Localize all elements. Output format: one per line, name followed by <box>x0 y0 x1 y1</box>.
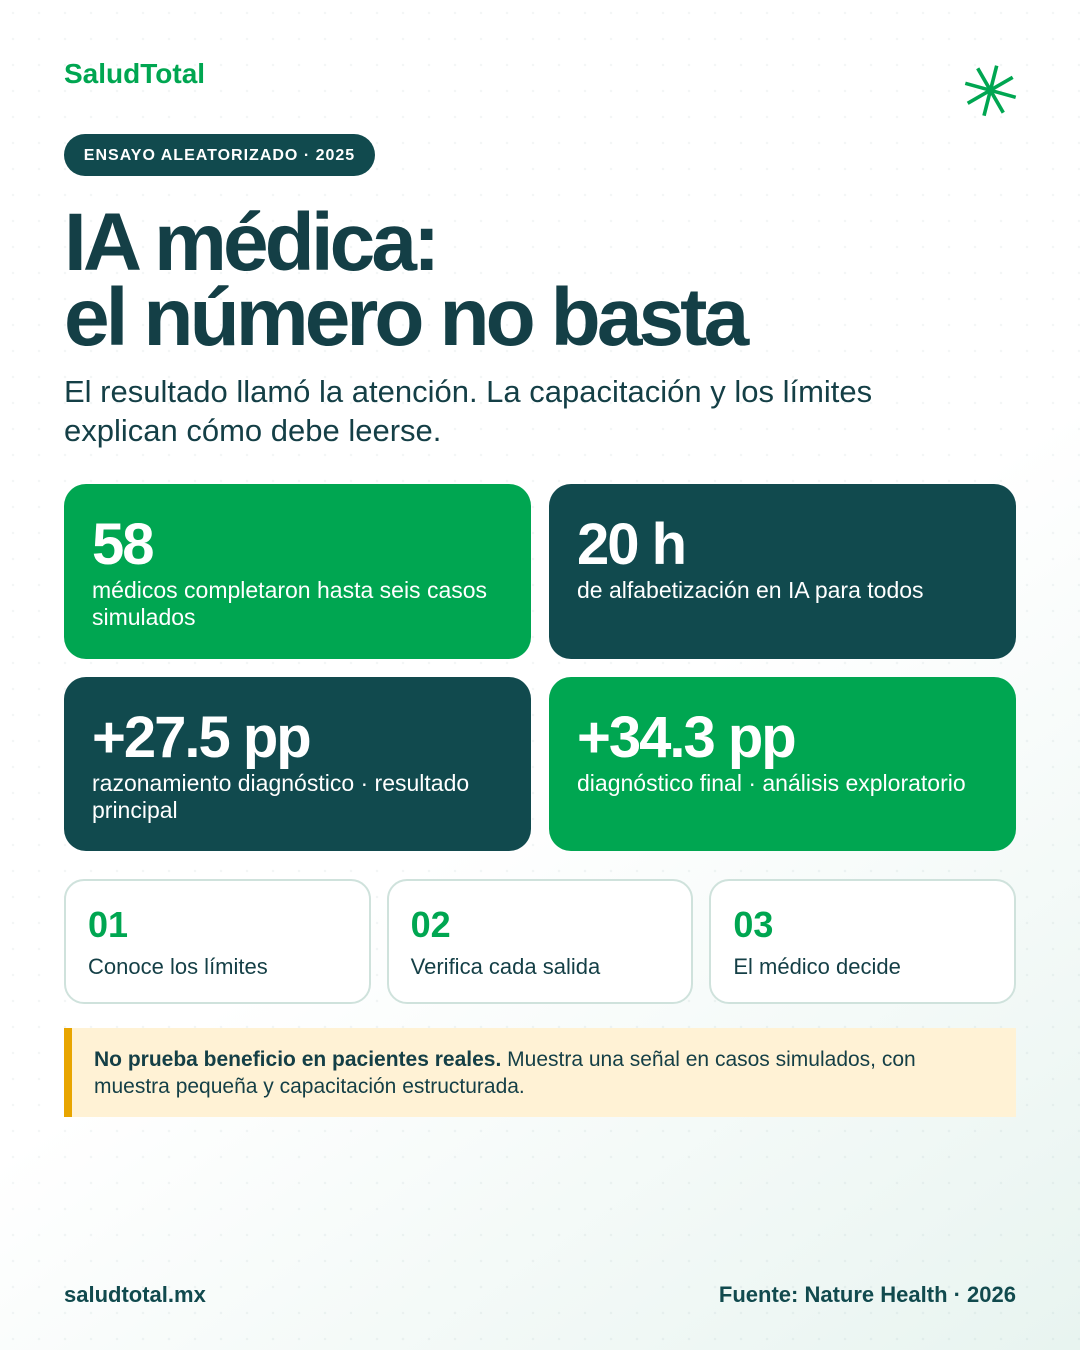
stat card: +34.3 pp <box>549 677 1016 851</box>
stat card: 20 h <box>549 484 1016 659</box>
stat card: +34.3 pp: diagnóstico final · análisis exploratorio <box>577 770 966 796</box>
stat card: 58: médicos completaron hasta seis casos simulados <box>92 577 487 630</box>
title: el número no basta <box>64 272 745 363</box>
stat card: 58 <box>64 484 531 659</box>
brand name: SaludTotal <box>64 58 205 89</box>
stat card: +27.5 pp: razonamiento diagnóstico · resultado principal <box>92 770 469 823</box>
step 03: El médico decide <box>733 954 901 979</box>
footer source: Fuente: Nature Health · 2026 <box>719 1282 1016 1307</box>
step 01: Conoce los límites <box>88 954 268 979</box>
stat card: 20 h: de alfabetización en IA para todos <box>577 577 924 603</box>
warning callout: No prueba beneficio en pacientes reales. Muestra una señal en casos simulados, con muestra pequeña y capacitación estructurada. <box>94 1048 916 1098</box>
icon: green asterisk <box>964 65 1016 116</box>
stat card: +27.5 pp: +27.5 pp <box>92 705 310 770</box>
step 01: 01 <box>88 904 128 945</box>
stat card: 58: 58 <box>92 512 153 577</box>
title: IA médica: <box>64 197 436 288</box>
step 02: Verifica cada salida <box>411 954 600 979</box>
step 02 <box>387 879 693 1004</box>
subtitle: explican cómo debe leerse. <box>64 413 441 448</box>
subtitle <box>64 374 872 448</box>
badge: ENSAYO ALEATORIZADO · 2025 <box>84 147 355 164</box>
warning callout <box>64 1028 1016 1117</box>
stat card: 20 h: 20 h <box>577 512 685 577</box>
title <box>64 197 750 363</box>
subtitle: El resultado llamó la atención. La capacitación y los límites <box>64 374 872 409</box>
step 03: 03 <box>733 904 773 945</box>
step 01 <box>64 879 371 1004</box>
badge <box>64 134 375 176</box>
step 02: 02 <box>411 904 451 945</box>
stat card: +34.3 pp: +34.3 pp <box>577 705 795 770</box>
step 03 <box>709 879 1016 1004</box>
stat card: +27.5 pp <box>64 677 531 851</box>
footer website: saludtotal.mx <box>64 1282 206 1307</box>
